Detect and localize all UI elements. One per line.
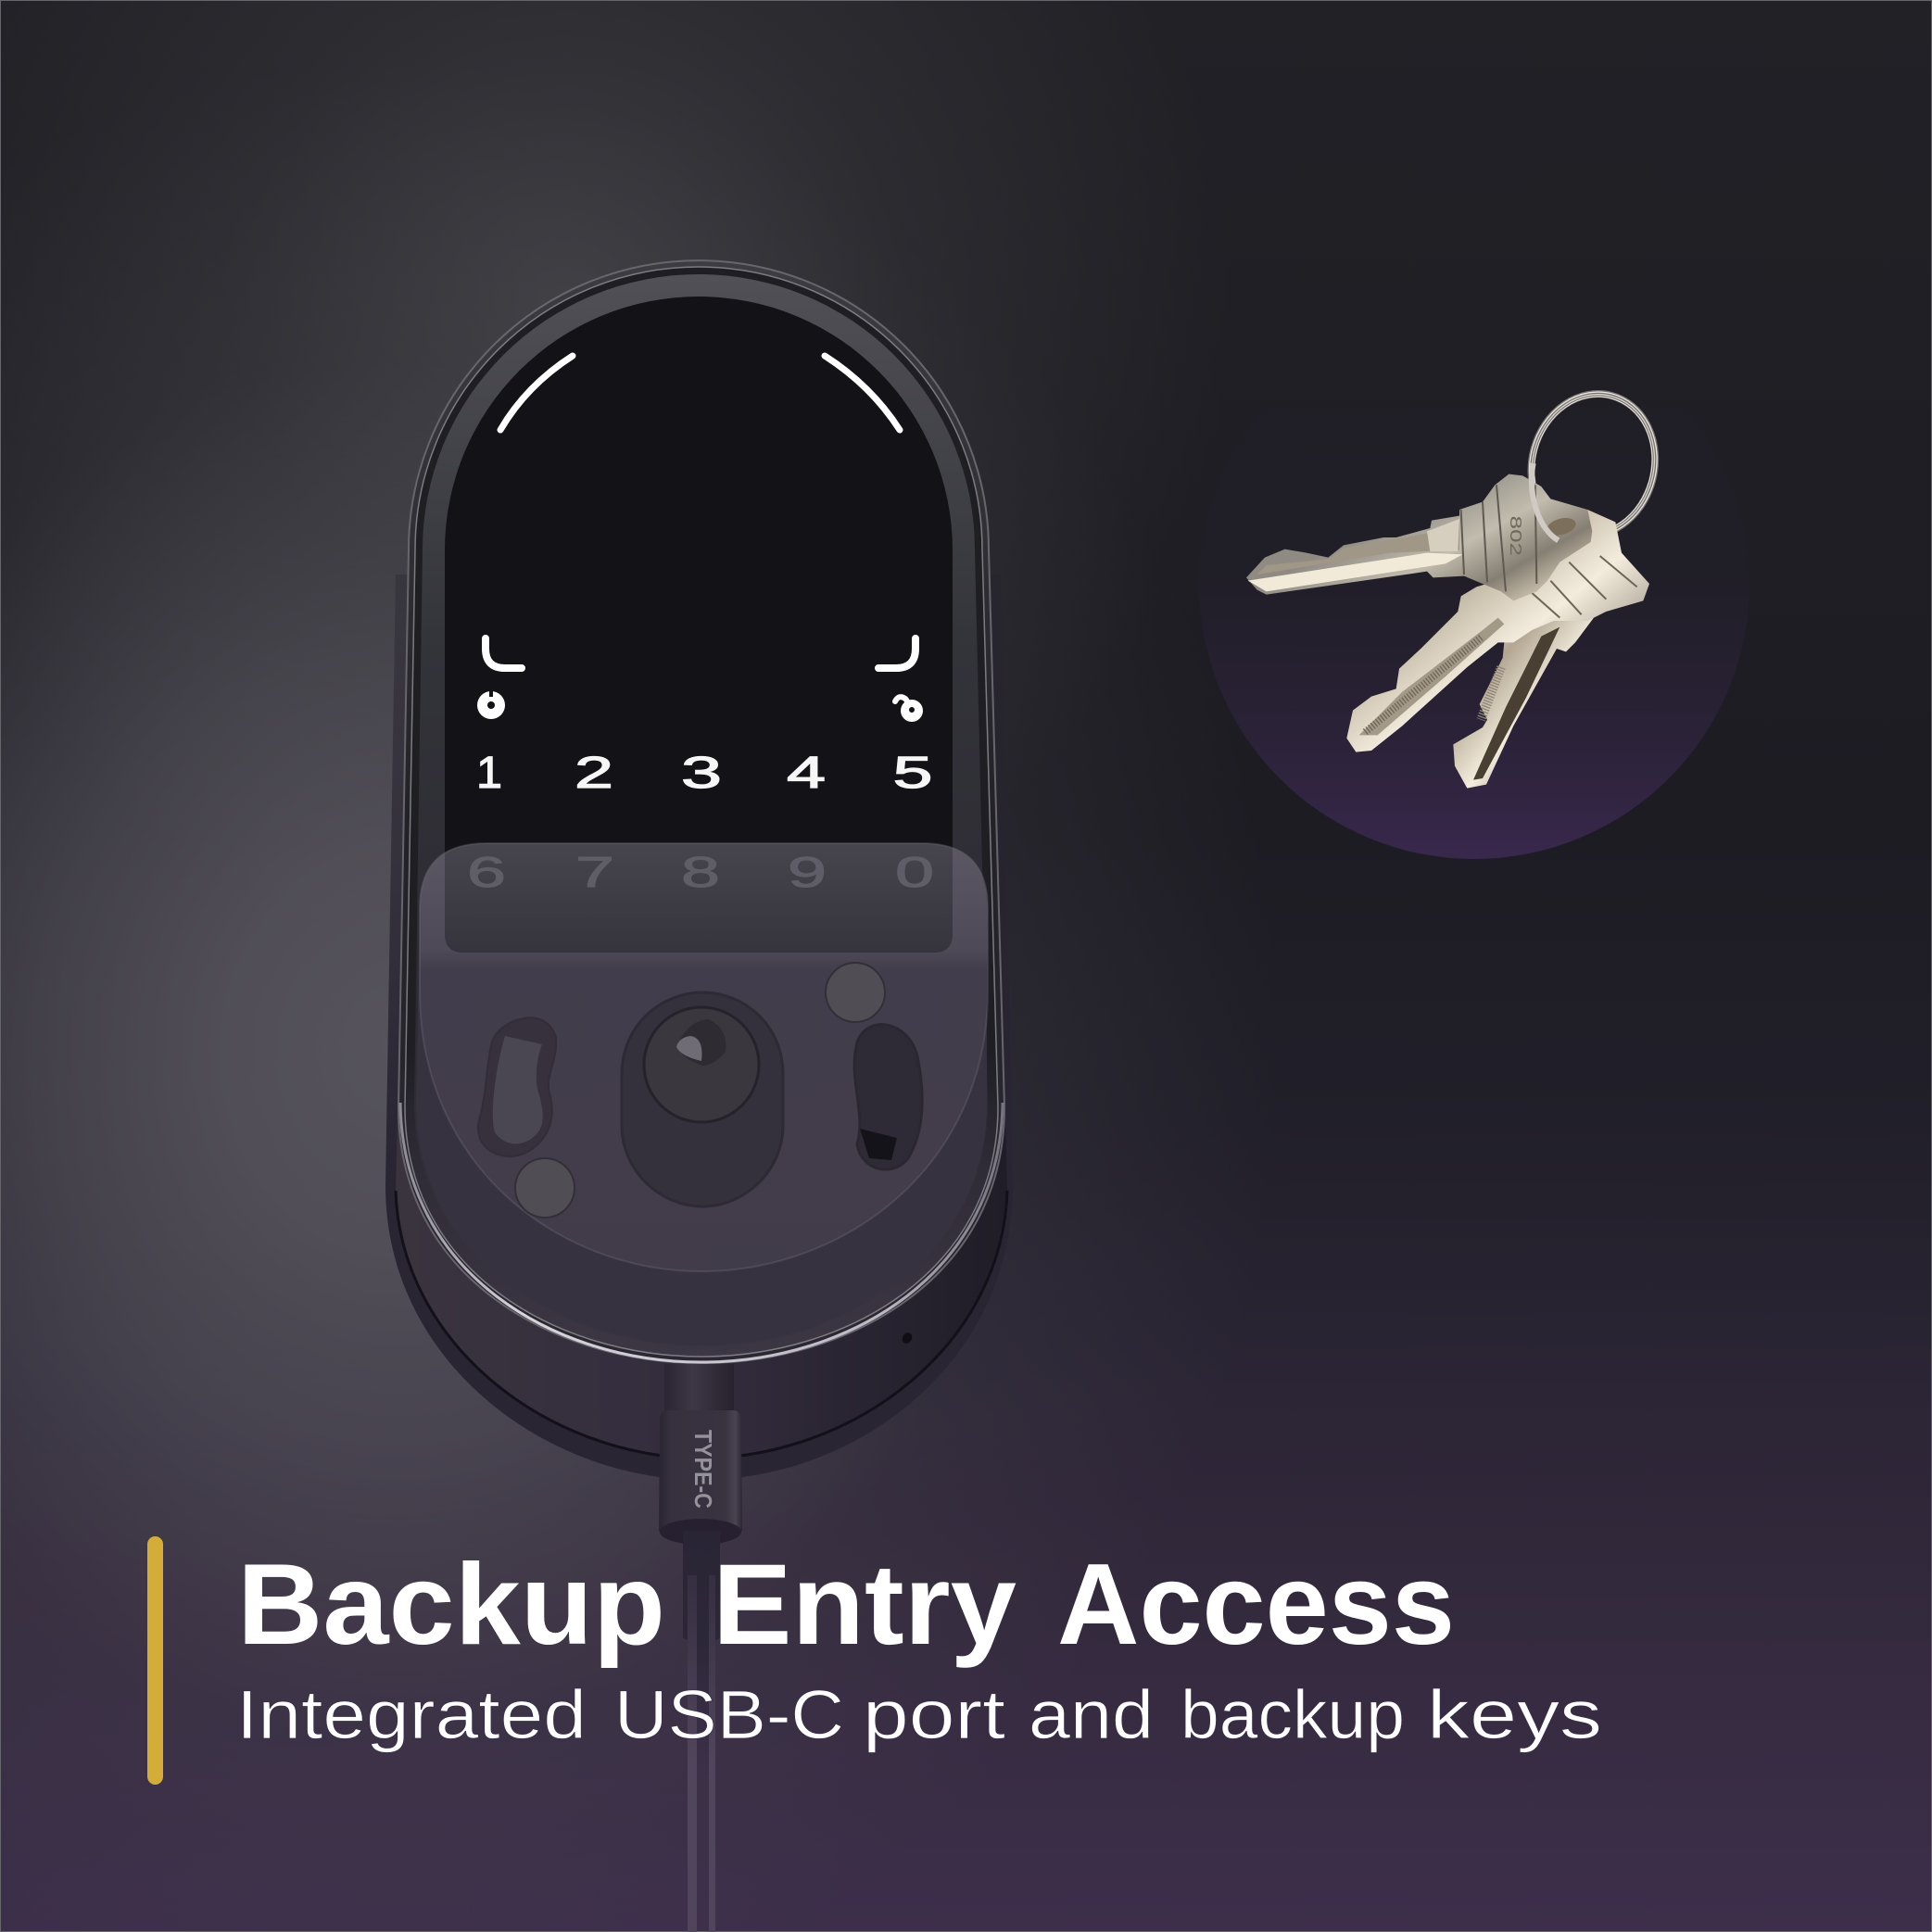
connector neck	[664, 1364, 734, 1412]
keypad digits bottom row: 9	[788, 848, 827, 896]
cable cord	[683, 1538, 720, 1932]
ring front segment	[1532, 463, 1559, 540]
title	[237, 1541, 1455, 1669]
USB-C cable	[659, 1364, 742, 1932]
USB-C connector	[659, 1410, 742, 1546]
LED arc right	[825, 356, 900, 430]
front key	[1246, 474, 1592, 600]
silver rim highlight	[400, 1103, 1003, 1362]
title: Entry	[713, 1541, 1017, 1669]
keypad glass screen	[445, 297, 953, 953]
split ring	[1513, 377, 1673, 552]
rear key	[1453, 614, 1594, 789]
lock base plate	[385, 575, 1013, 1480]
keypad digits top row: 2	[575, 749, 613, 798]
subtitle: USB-C	[614, 1676, 844, 1753]
keypad digits top row: 1	[476, 749, 502, 798]
key stamp: 802	[1507, 516, 1525, 556]
translucent cover plate	[420, 843, 988, 1271]
subtitle	[236, 1676, 1602, 1753]
lower tray	[416, 845, 987, 1345]
key cylinder	[644, 1007, 759, 1122]
cable sheen right	[709, 1575, 715, 1932]
middle key	[1346, 510, 1649, 752]
keypad digits top row: 4	[787, 749, 826, 798]
keypad digits bottom row	[467, 848, 934, 896]
cord top over cap	[683, 1531, 720, 1549]
corner bracket left	[486, 638, 522, 668]
icon: unlocked padlock	[895, 697, 923, 722]
screw top right	[826, 963, 885, 1022]
keypad digits bottom row: 7	[575, 848, 614, 896]
title: Backup	[237, 1541, 665, 1669]
spotlight circle behind keys	[1199, 309, 1749, 859]
keypad digits top row: 3	[681, 749, 722, 798]
bezel second line	[405, 267, 998, 1357]
connector label: TYPE-C	[689, 1430, 717, 1509]
keypad digits bottom row: 6	[467, 848, 506, 896]
keys on ring	[1246, 377, 1673, 789]
central key plate	[622, 992, 783, 1206]
subtitle: backup	[1181, 1676, 1405, 1753]
keypad digits bottom row: 8	[681, 848, 720, 896]
lock bezel	[398, 260, 1004, 1363]
corner bracket right	[878, 638, 915, 668]
cable sheen left	[688, 1575, 697, 1932]
subtitle: keys	[1427, 1676, 1602, 1753]
keypad digits bottom row: 0	[895, 848, 934, 896]
subtitle: port	[863, 1676, 1006, 1753]
title: Access	[1057, 1541, 1455, 1669]
connector end cap	[660, 1519, 741, 1545]
base groove line	[396, 1191, 1007, 1458]
right mounting slot	[854, 1025, 922, 1169]
gold accent bar	[147, 1536, 163, 1785]
smart lock device	[385, 260, 1013, 1480]
left mounting slot	[478, 1017, 556, 1156]
icon: locked padlock	[477, 691, 505, 719]
keypad digits top row: 5	[893, 749, 932, 798]
base top surface	[396, 1019, 1007, 1458]
LED arc left	[500, 356, 573, 430]
keypad digits top row	[476, 749, 932, 798]
screw bottom left	[515, 1158, 575, 1218]
bezel inner band	[414, 274, 988, 1347]
subtitle: Integrated	[236, 1676, 587, 1753]
reset pinhole	[901, 1331, 914, 1345]
subtitle: and	[1029, 1676, 1154, 1753]
